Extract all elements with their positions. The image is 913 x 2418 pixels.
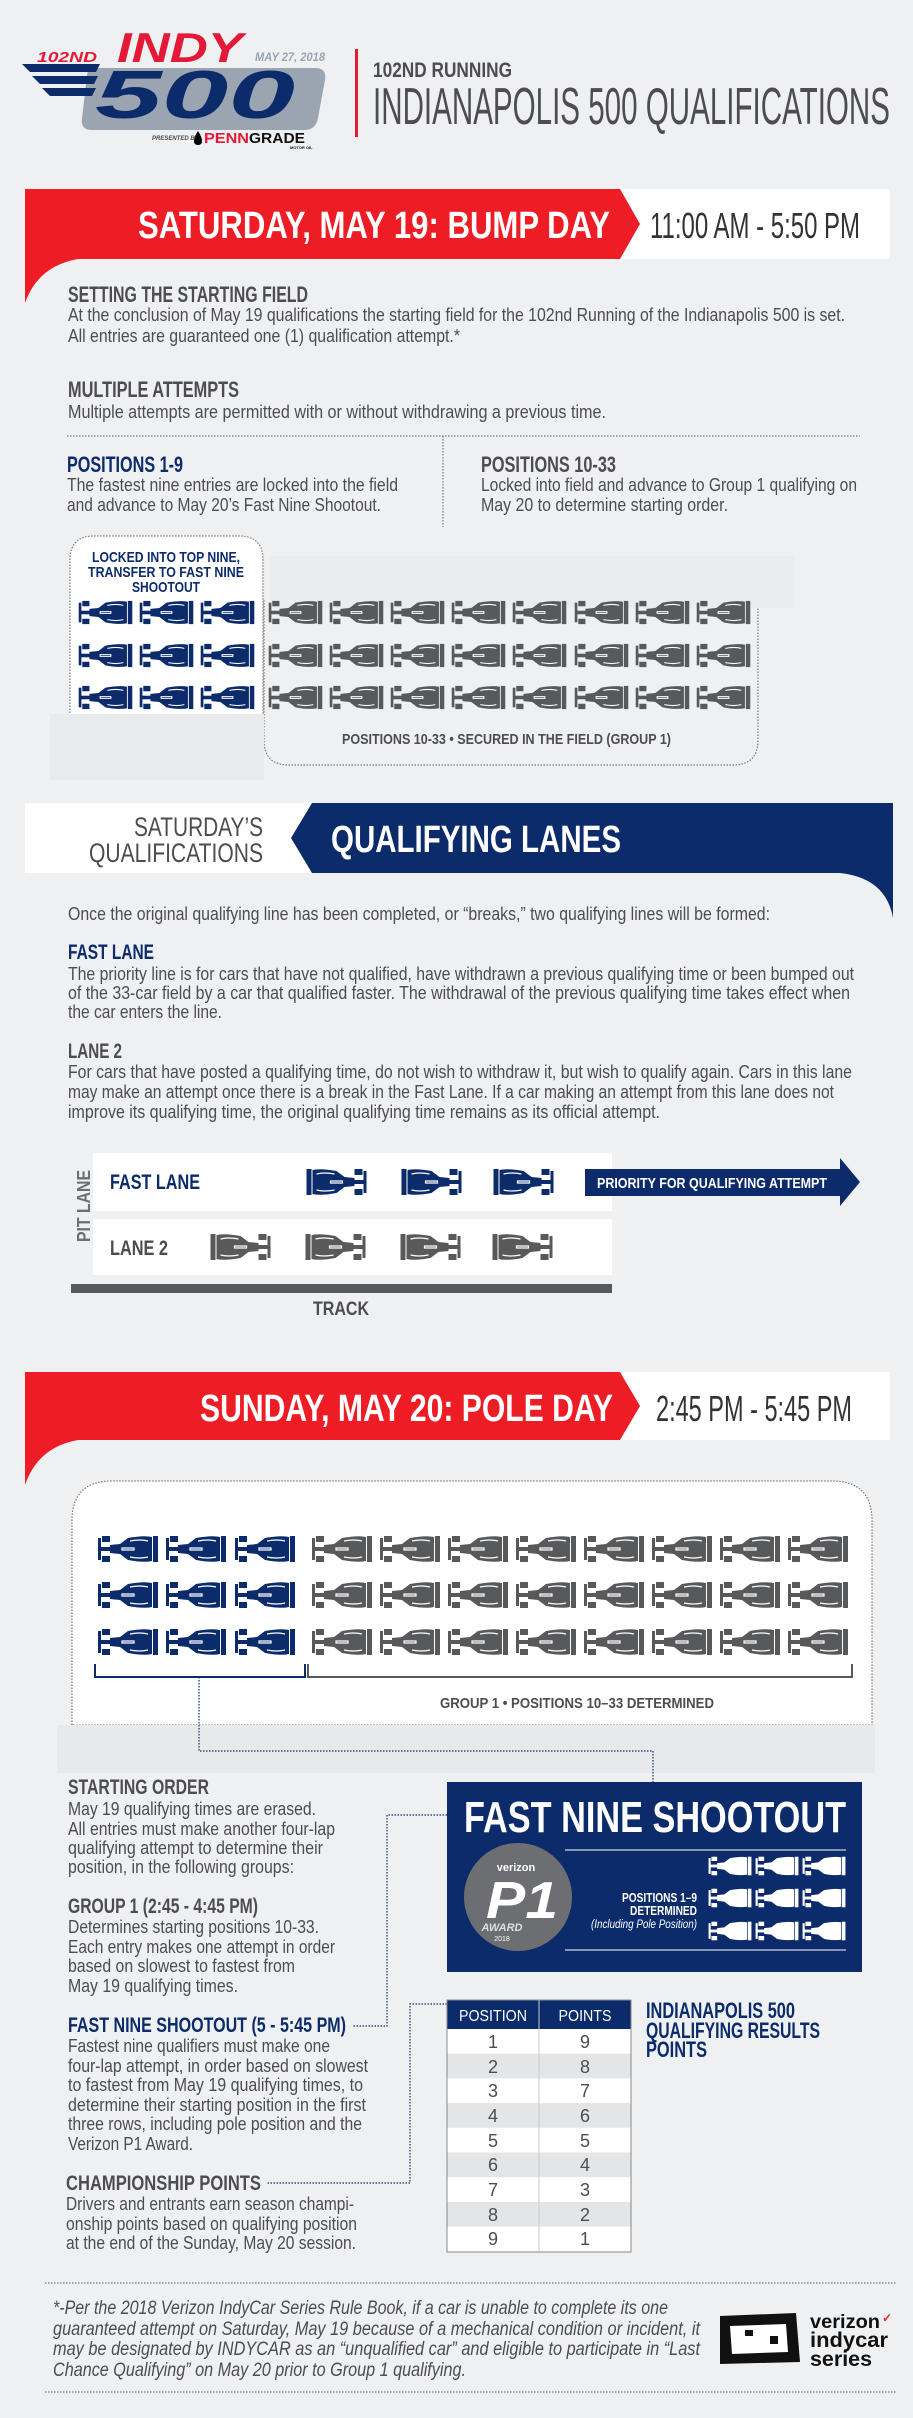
text block: positions 1-9: The fastest nine entries are locked into the field xyxy=(67,475,398,495)
text block: fast lane xyxy=(68,941,854,1022)
table: qualifying points: 3 xyxy=(488,2081,498,2101)
text block: starting order: All entries must make another four-lap xyxy=(68,1819,335,1839)
icon: Verizon P1 award xyxy=(464,1843,572,1951)
heading: table title: POINTS xyxy=(646,2037,707,2062)
cars: fast lane xyxy=(306,1169,554,1195)
text block: fast nine shootout: Fastest nine qualifiers must make one xyxy=(68,2036,330,2056)
text block: championship points: CHAMPIONSHIP POINTS xyxy=(66,2172,261,2195)
logo: Indy 500: MOTOR OIL xyxy=(290,145,313,150)
table: qualifying points: 6 xyxy=(580,2106,590,2126)
text block: championship points: onship points based on qualifying position xyxy=(66,2214,357,2234)
callout: locked into top nine xyxy=(88,549,244,596)
text block: multiple attempts: MULTIPLE ATTEMPTS xyxy=(68,377,239,402)
text block: fast nine shootout: three rows, including pole position and the xyxy=(68,2114,362,2134)
text block: group 1: GROUP 1 (2:45 - 4:45 PM) xyxy=(68,1895,258,1918)
text block: group 1: based on slowest to fastest from xyxy=(68,1956,295,1976)
table: qualifying points: 8 xyxy=(488,2205,498,2225)
table: qualifying points: 4 xyxy=(580,2155,590,2175)
text block: championship points: at the end of the Sunday, May 20 session. xyxy=(66,2233,356,2253)
text block: positions 10-33: POSITIONS 10-33 xyxy=(481,452,616,477)
text block: multiple attempts xyxy=(68,377,606,422)
cars: top nine blue xyxy=(79,601,254,709)
track xyxy=(71,1284,612,1320)
logo: Indy 500: MAY 27, 2018 xyxy=(255,50,325,64)
label: positions 1-9 determined xyxy=(591,1890,697,1931)
heading: table title xyxy=(646,1998,820,2062)
grid: Sunday field of 33 xyxy=(72,1481,872,1725)
text block: fast nine shootout: determine their starting position in the first xyxy=(68,2095,366,2115)
grid: Saturday field of 33 xyxy=(50,536,795,780)
label: positions 1-9 determined: DETERMINED xyxy=(630,1903,697,1918)
label: group 1 determined: GROUP 1 • POSITIONS 10–33 DETERMINED xyxy=(440,1695,714,1712)
icon: Verizon P1 award: AWARD xyxy=(481,1922,523,1934)
text block: group 1: May 19 qualifying times. xyxy=(68,1976,238,1996)
logo: Indy 500: INDY xyxy=(117,24,248,71)
text block: lane 2: improve its qualifying time, the original qualifying time remains as its official attempt. xyxy=(68,1102,660,1122)
track: TRACK xyxy=(313,1299,369,1320)
table: qualifying points: 9 xyxy=(488,2229,498,2249)
cars: lane 2 xyxy=(210,1234,552,1260)
text block: championship points xyxy=(66,2172,357,2253)
table: qualifying points: 3 xyxy=(580,2180,590,2200)
text block: championship points: Drivers and entrants earn season champi- xyxy=(66,2194,354,2214)
table: qualifying points: 8 xyxy=(580,2057,590,2077)
table: qualifying points: 4 xyxy=(488,2106,498,2126)
diagram: pit lanes: LANE 2 xyxy=(110,1237,168,1260)
footnote: may be designated by INDYCAR as an “unqualified car” and eligible to participate in “Last xyxy=(53,2339,701,2360)
text block: lanes intro: Once the original qualifying line has been completed, or “breaks,” two qualifying lines will be formed: xyxy=(68,904,770,924)
panel: fast nine shootout xyxy=(447,1782,862,1972)
text block: starting order: STARTING ORDER xyxy=(68,1776,209,1799)
footnote xyxy=(53,2298,701,2381)
text block: fast nine shootout: Verizon P1 Award. xyxy=(68,2134,193,2154)
text block: positions 10-33: May 20 to determine starting order. xyxy=(481,495,728,515)
banner: qualifying lanes: QUALIFYING LANES xyxy=(331,819,621,861)
table: qualifying points: 1 xyxy=(488,2032,498,2052)
text block: setting the starting field: All entries are guaranteed one (1) qualification attempt.* xyxy=(68,326,460,346)
table: qualifying points: 2 xyxy=(488,2057,498,2077)
text block: fast lane: the car enters the line. xyxy=(68,1002,222,1022)
logo: Indy 500: PENN xyxy=(204,130,249,147)
callout: locked into top nine: SHOOTOUT xyxy=(132,579,200,596)
logo: Indy 500: GRADE xyxy=(249,130,305,147)
table: qualifying points: 5 xyxy=(488,2131,498,2151)
logo: Indy 500 xyxy=(22,24,325,150)
table: qualifying points xyxy=(447,2000,631,2252)
diagram: pit lanes: FAST LANE xyxy=(110,1171,200,1194)
text block: positions 10-33: Locked into field and advance to Group 1 qualifying on xyxy=(481,475,857,495)
logo: Verizon IndyCar Series: verizon xyxy=(810,2312,880,2333)
connectors: dotted guides xyxy=(266,1815,447,2183)
text block: starting order xyxy=(68,1776,335,1877)
text block: setting the starting field: SETTING THE STARTING FIELD xyxy=(68,282,308,307)
banner: Sunday pole day: SUNDAY, MAY 20: POLE DAY xyxy=(200,1388,613,1430)
table: qualifying points: 9 xyxy=(580,2032,590,2052)
banner: Sunday pole day xyxy=(25,1372,890,1485)
table: qualifying points: 7 xyxy=(580,2081,590,2101)
logo: Verizon IndyCar Series: ✓ xyxy=(882,2311,892,2325)
title: 102ND RUNNING xyxy=(373,59,512,82)
label: positions 10-33 secured: POSITIONS 10-33 • SECURED IN THE FIELD (GROUP 1) xyxy=(342,731,671,748)
callout: locked into top nine: TRANSFER TO FAST NINE xyxy=(88,564,244,581)
logo: Verizon IndyCar Series xyxy=(720,2311,892,2371)
icon: Verizon P1 award: verizon xyxy=(497,1862,536,1874)
text block: setting the starting field xyxy=(68,282,845,346)
table: qualifying points: 1 xyxy=(580,2229,590,2249)
heading: table title: QUALIFYING RESULTS xyxy=(646,2018,820,2043)
footnote: Chance Qualifying” on May 20 prior to Group 1 qualifying. xyxy=(53,2360,466,2381)
footnote: *-Per the 2018 Verizon IndyCar Series Rule Book, if a car is unable to complete its one xyxy=(53,2298,668,2319)
table: qualifying points: 2 xyxy=(580,2205,590,2225)
callout: locked into top nine: LOCKED INTO TOP NINE, xyxy=(92,549,240,566)
table: qualifying points: 5 xyxy=(580,2131,590,2151)
logo: Indy 500: 102ND xyxy=(37,49,97,66)
banner: qualifying lanes: QUALIFICATIONS xyxy=(89,838,263,868)
logo: Verizon IndyCar Series: series xyxy=(810,2348,872,2371)
text block: starting order: May 19 qualifying times are erased. xyxy=(68,1799,316,1819)
text block: fast nine shootout xyxy=(68,2014,368,2154)
text block: fast nine shootout: FAST NINE SHOOTOUT (5 - 5:45 PM) xyxy=(68,2014,346,2037)
divider: red vertical xyxy=(355,49,358,137)
text block: starting order: qualifying attempt to determine their xyxy=(68,1838,323,1858)
text block: positions 1-9: and advance to May 20’s Fast Nine Shootout. xyxy=(67,495,381,515)
banner: Saturday bump day: SATURDAY, MAY 19: BUMP DAY xyxy=(138,205,610,247)
table: qualifying points: 7 xyxy=(488,2180,498,2200)
text block: lane 2: LANE 2 xyxy=(68,1040,122,1063)
banner: qualifying lanes: SATURDAY’S xyxy=(134,812,263,842)
connector: fast nine to shootout box xyxy=(199,1677,653,1782)
logo: Verizon IndyCar Series: indycar xyxy=(810,2329,888,2352)
text block: fast nine shootout: four-lap attempt, in order based on slowest xyxy=(68,2056,368,2076)
arrow: priority for qualifying attempt: PRIORITY FOR QUALIFYING ATTEMPT xyxy=(597,1175,827,1192)
text block: group 1: Determines starting positions 10-33. xyxy=(68,1917,319,1937)
label: pit lane: PIT LANE xyxy=(74,1170,94,1242)
text block: positions 1-9: POSITIONS 1-9 xyxy=(67,452,183,477)
heading: table title: INDIANAPOLIS 500 xyxy=(646,1998,795,2023)
label: positions 1-9 determined: POSITIONS 1–9 xyxy=(622,1890,697,1905)
banner: Saturday bump day xyxy=(25,189,890,303)
text block: multiple attempts: Multiple attempts are permitted with or without withdrawing a previous time. xyxy=(68,402,606,422)
banner: qualifying lanes xyxy=(25,803,893,918)
table: qualifying points: POINTS xyxy=(558,2008,612,2025)
footnote: guaranteed attempt on Saturday, May 19 because of a mechanical condition or incident, it xyxy=(53,2319,701,2340)
logo: Indy 500: PRESENTED BY: xyxy=(152,136,200,142)
icon: Verizon P1 award: 2018 xyxy=(494,1936,510,1943)
logo: Indy 500: 500 xyxy=(95,57,295,133)
cars: fast nine blue xyxy=(98,1536,295,1655)
cars: group 1 gray xyxy=(312,1536,848,1655)
text block: fast nine shootout: to fastest from May 19 qualifying times, to xyxy=(68,2075,363,2095)
arrow: priority for qualifying attempt xyxy=(585,1158,860,1206)
icon: Verizon P1 award: P1 xyxy=(486,1872,558,1930)
text block: positions 10-33 xyxy=(481,452,857,515)
text block: group 1: Each entry makes one attempt in order xyxy=(68,1937,335,1957)
text block: lane 2 xyxy=(68,1040,852,1122)
table: qualifying points: 6 xyxy=(488,2155,498,2175)
text block: group 1 xyxy=(68,1895,335,1996)
text block: fast lane: FAST LANE xyxy=(68,941,154,964)
label: positions 1-9 determined: (Including Pole Position) xyxy=(591,1917,697,1931)
text block: positions 1-9 xyxy=(67,452,398,515)
text block: starting order: position, in the following groups: xyxy=(68,1857,294,1877)
cars: positions 10-33 gray xyxy=(269,601,750,709)
table: qualifying points: POSITION xyxy=(459,2008,527,2025)
diagram: pit lanes xyxy=(71,1153,860,1320)
cars: fast nine white xyxy=(709,1857,845,1940)
